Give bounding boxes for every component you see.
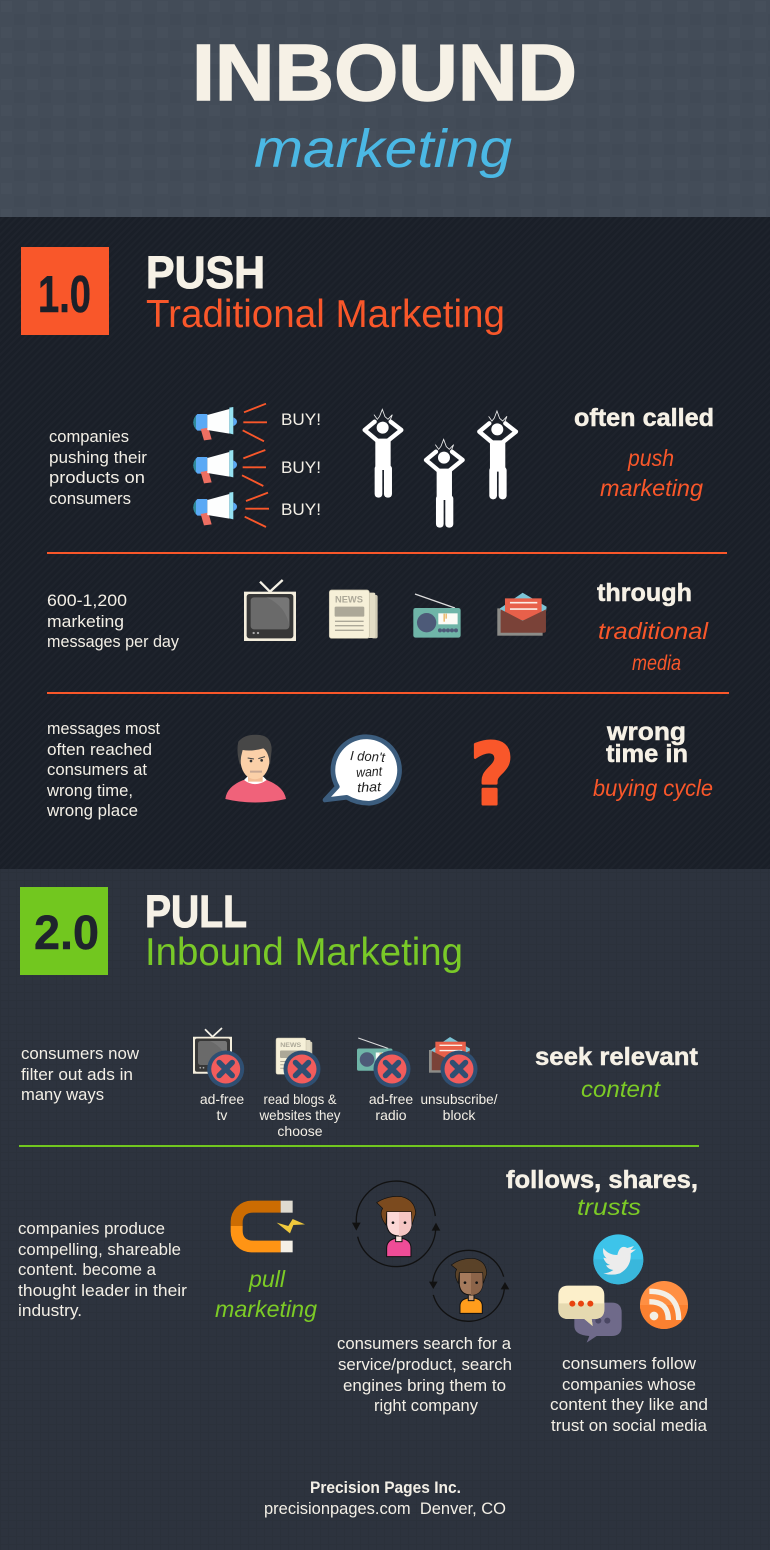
- callout: seek relevant content: seek relevant: [535, 1043, 699, 1071]
- section heading push: PUSH: [146, 247, 265, 298]
- footer: precisionpages.com Denver, CO: [264, 1500, 506, 1518]
- text: companies produce content: thought leader in their: [18, 1282, 188, 1300]
- section heading pull: Inbound Marketing: [145, 931, 463, 974]
- text: consumers follow: consumers follow: [562, 1355, 696, 1373]
- section heading push: [146, 247, 505, 336]
- text: consumers follow: trust on social media: [551, 1417, 708, 1435]
- callout: wrong time in buying cycle: buying cycle: [593, 775, 713, 801]
- callout: often called push marketing: [574, 404, 714, 501]
- callout: pull marketing: [215, 1266, 317, 1322]
- text: companies produce content: industry.: [18, 1302, 82, 1320]
- callout: seek relevant content: [535, 1043, 699, 1102]
- icon: annoyed man: [225, 735, 286, 802]
- text: consumers search: engines bring them to: [343, 1377, 506, 1395]
- text: consumers filter ads: filter out ads in: [21, 1066, 133, 1084]
- icon: blocked news: read blogs &: [264, 1091, 337, 1107]
- text: messages per day: marketing: [47, 613, 124, 631]
- icon: blocked news: [259, 1038, 340, 1139]
- text: companies produce content: companies produce: [18, 1220, 165, 1238]
- text: messages per day: [47, 592, 180, 651]
- text: companies pushing: pushing their: [49, 449, 148, 467]
- icon: blocked news: websites they: [259, 1107, 340, 1123]
- callout: follows shares trusts: [506, 1166, 698, 1220]
- icon: twitter: [593, 1234, 643, 1284]
- icon: person with cycle arrows one: [352, 1181, 440, 1267]
- icon: ad-free tv: tv: [217, 1107, 227, 1123]
- text: wrong time wrong place: often reached: [47, 741, 152, 759]
- section badge 2.0: 2.0: [34, 907, 99, 960]
- icon: speech bubble I don't want that: I don't: [350, 748, 387, 765]
- callout: pull marketing: marketing: [215, 1296, 317, 1322]
- section heading pull: PULL: [145, 886, 247, 937]
- text: companies produce content: content. become a: [18, 1261, 157, 1279]
- icon: person with cycle arrows two: [429, 1250, 509, 1321]
- panel: push traditional marketing: [0, 217, 770, 869]
- text: companies produce content: [18, 1220, 188, 1320]
- callout: wrong time in buying cycle: [593, 718, 713, 801]
- footer: Precision Pages Inc.: [310, 1479, 461, 1497]
- icon: blocked news: choose: [277, 1123, 323, 1139]
- text: companies pushing: consumers: [49, 490, 131, 508]
- callout: through traditional media: media: [632, 652, 681, 675]
- panel: header: [0, 0, 770, 217]
- callout: often called push marketing: push: [627, 445, 674, 471]
- icon: unsubscribe mail: unsubscribe/: [420, 1091, 498, 1107]
- icon: rss: [640, 1281, 688, 1329]
- callout: follows shares trusts: follows, shares,: [506, 1166, 698, 1194]
- text: consumers filter ads: consumers now: [21, 1045, 139, 1063]
- text: consumers follow: companies whose: [562, 1376, 696, 1394]
- callout: seek relevant content: content: [581, 1076, 662, 1102]
- icon: megaphones with BUY: BUY!: [281, 411, 321, 429]
- title: INBOUND: [192, 28, 577, 117]
- callout: follows shares trusts: trusts: [577, 1194, 642, 1220]
- text: messages per day: 600-1,200: [47, 592, 127, 610]
- icon: chat bubbles: [558, 1286, 622, 1343]
- text: consumers filter ads: many ways: [21, 1086, 104, 1104]
- text: wrong time wrong place: wrong place: [46, 802, 138, 820]
- subtitle: marketing: [254, 119, 512, 179]
- icon: ad-free radio: radio: [375, 1107, 407, 1123]
- icon: frustrated figures: [365, 409, 516, 528]
- icon: speech bubble I don't want that: [325, 737, 400, 803]
- panel: pull inbound marketing: [0, 869, 770, 1550]
- callout: wrong time in buying cycle: time in: [606, 740, 688, 768]
- callout: often called push marketing: marketing: [600, 475, 703, 501]
- text: wrong time wrong place: wrong time,: [46, 782, 133, 800]
- text: consumers search: consumers search for a: [337, 1335, 512, 1353]
- icon: ad-free tv: ad-free: [200, 1091, 244, 1107]
- callout: through traditional media: [597, 579, 709, 675]
- text: messages per day: messages per day: [47, 633, 180, 651]
- section heading push: Traditional Marketing: [146, 293, 505, 336]
- icon: unsubscribe mail: block: [443, 1107, 476, 1123]
- icon: megaphones with BUY: [193, 404, 321, 527]
- text: companies pushing: products on: [49, 469, 145, 487]
- icon: megaphones with BUY: BUY!: [281, 459, 321, 477]
- callout: wrong time in buying cycle: wrong: [606, 718, 686, 746]
- icon: speech bubble I don't want that: want: [356, 764, 384, 780]
- callout: through traditional media: traditional: [598, 618, 709, 644]
- icon: newspaper: [329, 590, 378, 638]
- icon: ad-free radio: ad-free: [369, 1091, 413, 1107]
- text: companies produce content: compelling, shareable: [18, 1241, 181, 1259]
- icon: tv: [244, 580, 296, 641]
- section heading pull: [145, 886, 463, 974]
- icon: question mark: ?: [470, 726, 514, 825]
- text: wrong time wrong place: [46, 720, 160, 820]
- icon: speech bubble I don't want that: that: [357, 779, 383, 795]
- callout: often called push marketing: often called: [574, 404, 714, 432]
- text: consumers follow: [550, 1355, 708, 1435]
- text: wrong time wrong place: messages most: [47, 720, 160, 738]
- text: consumers search: service/product, search: [338, 1356, 512, 1374]
- text: consumers search: [337, 1335, 512, 1415]
- icon: unsubscribe mail: [420, 1037, 498, 1123]
- text: consumers follow: content they like and: [550, 1396, 708, 1414]
- footer: [264, 1479, 506, 1518]
- callout: pull marketing: pull: [248, 1266, 286, 1292]
- icon: radio: [413, 594, 461, 638]
- section badge 1.0: [21, 247, 109, 335]
- text: companies pushing: companies: [49, 428, 129, 446]
- icon: magnet: [231, 1201, 305, 1252]
- section badge 1.0: 1.0: [38, 266, 91, 324]
- icon: ad-free radio: [357, 1038, 413, 1123]
- icon: megaphones with BUY: BUY!: [281, 501, 321, 519]
- callout: through traditional media: through: [597, 579, 692, 607]
- icon: ad-free tv: [193, 1028, 244, 1123]
- text: wrong time wrong place: consumers at: [47, 761, 147, 779]
- icon: mail: [497, 593, 547, 636]
- text: consumers search: right company: [374, 1397, 479, 1415]
- text: consumers filter ads: [21, 1045, 139, 1104]
- text: companies pushing: [49, 428, 148, 508]
- section badge 2.0: [20, 887, 108, 975]
